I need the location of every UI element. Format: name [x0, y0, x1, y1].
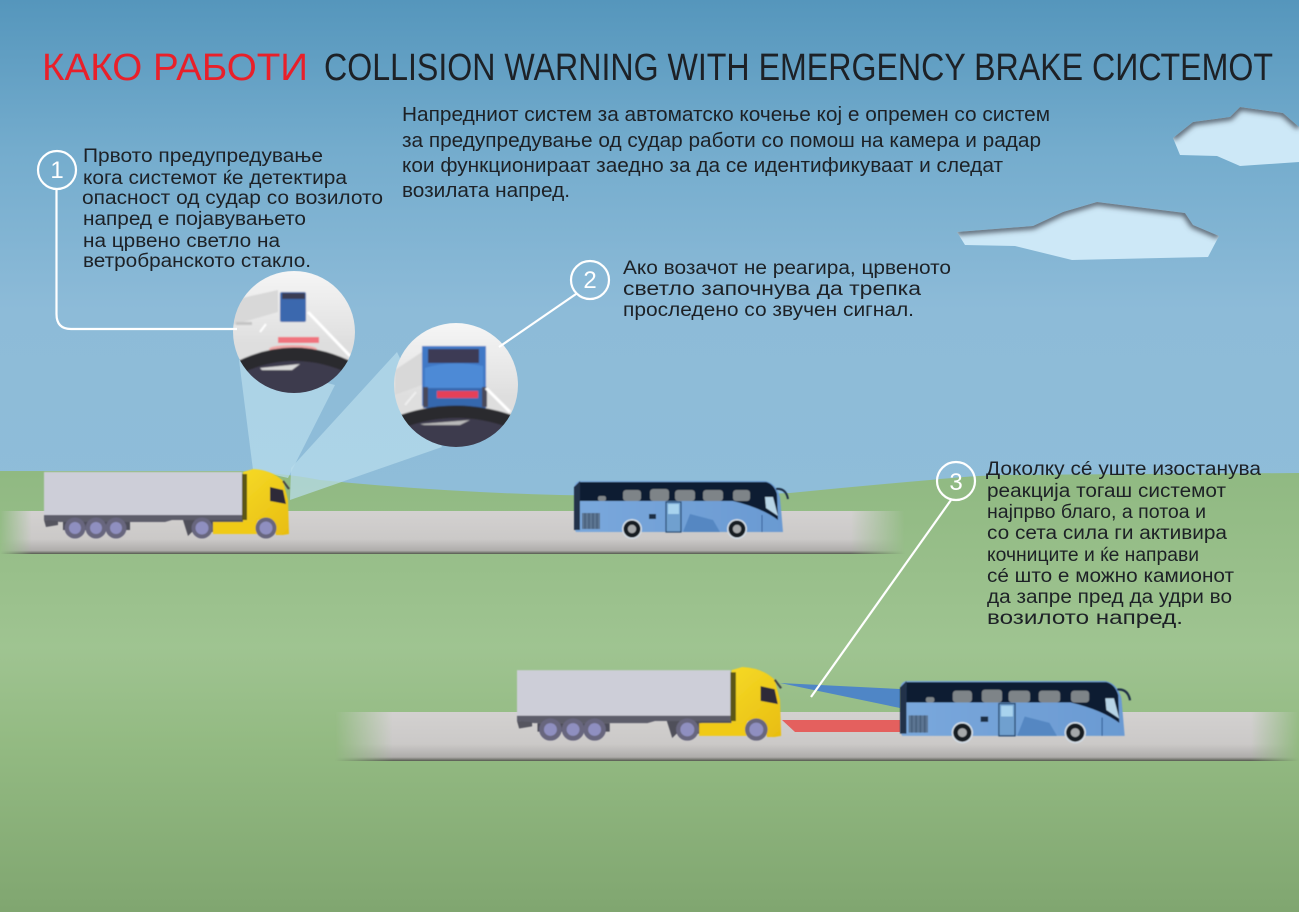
callout 3 text: [986, 459, 1261, 629]
callout 3: marker and leader line: [811, 462, 975, 697]
callout 3 text: со сета сила ги активира: [987, 523, 1227, 544]
radar beam: [780, 683, 900, 708]
callout 1 text: Првото предупредување: [83, 146, 323, 167]
callout 2: marker and leader line: 2: [583, 267, 597, 294]
callout 2 text: светло започнува да трепка: [623, 279, 922, 300]
truck: lower: [517, 667, 781, 741]
callout 1 text: [82, 146, 383, 272]
callout 3 text: реакција тогаш системот: [987, 481, 1226, 502]
callout 3 text: возилото напред.: [987, 608, 1183, 629]
cloud: upper right: [1173, 107, 1299, 166]
intro text: возилата напред.: [402, 180, 570, 202]
callout 2: marker and leader line: [499, 261, 609, 347]
callout 3 text: да запре пред да удри во: [987, 587, 1232, 608]
road: upper: [0, 511, 905, 554]
truck: upper: [44, 469, 289, 538]
callout 1: marker and leader line: 1: [50, 157, 64, 184]
callout 1: marker and leader line: [38, 151, 237, 329]
callout 2 text: проследено со звучен сигнал.: [623, 300, 914, 321]
callout 1 text: на црвено светло на: [83, 231, 280, 252]
callout 3 text: Доколку сé уште изостанува: [986, 459, 1261, 480]
sky background: [0, 0, 1299, 500]
title: КАКО РАБОТИ: [42, 47, 308, 89]
callout 1 text: ветробранското стакло.: [83, 251, 311, 272]
callout 3 text: најпрво благо, а потоа и: [987, 502, 1206, 523]
bus: upper: [574, 481, 788, 539]
intro text: за предупредување од судар работи со помош на камера и радар: [402, 130, 1041, 152]
callout 1 text: кога системот ќе детектира: [83, 168, 347, 189]
light beam to first lens: [239, 360, 335, 478]
light beam to second lens: [290, 352, 442, 500]
bus: lower: [900, 681, 1130, 743]
callout 3: marker and leader line: 3: [949, 469, 963, 496]
cloud: lower right: [957, 202, 1219, 260]
lens 1: windshield view with distant bus: [230, 270, 358, 395]
brake zone: [782, 720, 900, 732]
callout 1 text: напред е појавувањето: [83, 209, 306, 230]
intro text: кои функционираат заедно за да се идентификуваат и следат: [402, 155, 1003, 177]
grass ground: [0, 471, 1299, 912]
road: lower: [335, 712, 1299, 761]
intro text: Напредниот систем за автоматско кочење кој е опремен со систем: [402, 104, 1050, 126]
callout 3 text: сé што е можно камионот: [987, 566, 1234, 587]
intro text: [402, 104, 1050, 202]
lens 2: windshield view with near bus: [392, 322, 520, 450]
callout 3 text: кочниците и ќе направи: [987, 545, 1199, 566]
callout 1 text: опасност од судар со возилото: [82, 188, 383, 209]
callout 2 text: Ако возачот не реагира, црвеното: [623, 258, 951, 279]
callout 2 text: [623, 258, 951, 321]
